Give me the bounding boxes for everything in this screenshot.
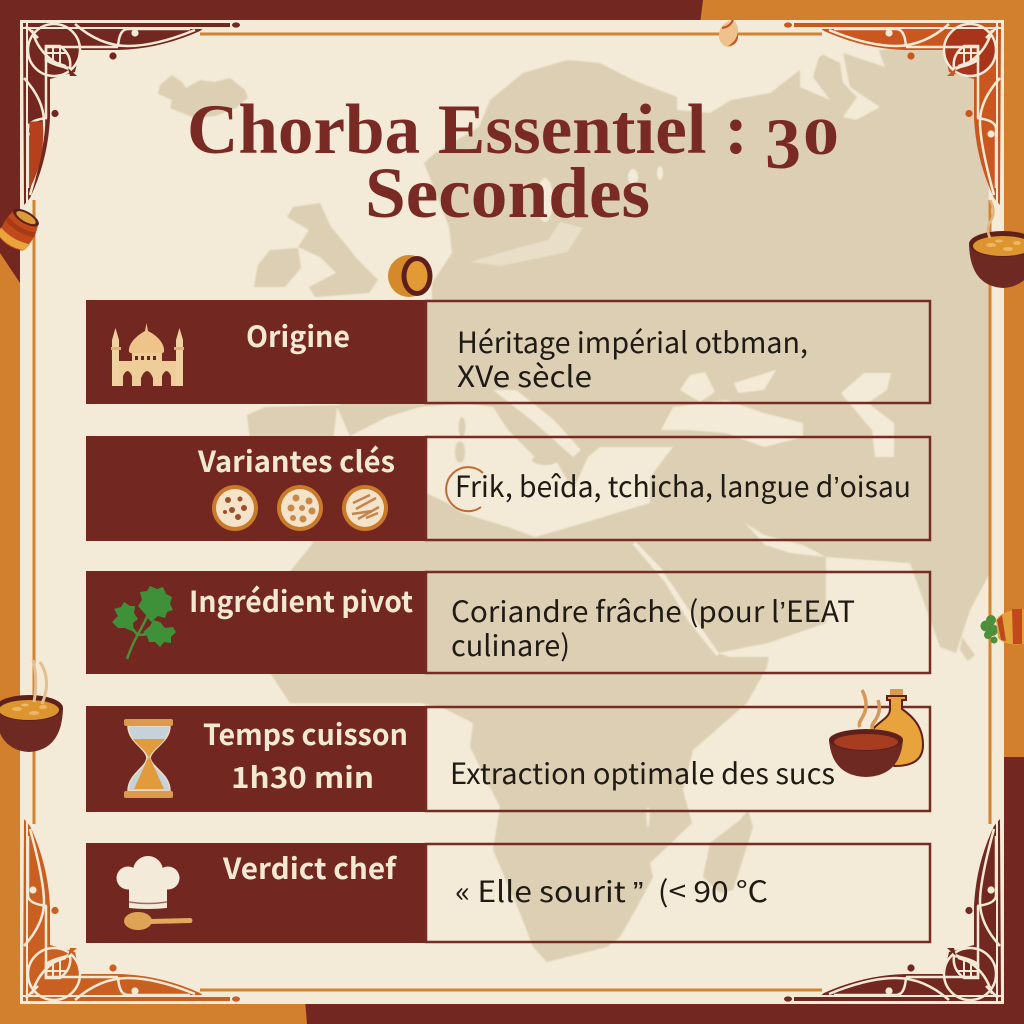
row 4: temps [86, 689, 930, 812]
text: verdict: « Elle sourit ” (< 90 °C [455, 869, 768, 911]
row 1: origine [86, 300, 930, 404]
text: variantes list: Frik, beîda, tchicha, langue d’oisau [455, 464, 911, 506]
map background [158, 36, 989, 962]
corner ornament bottom right [784, 819, 1001, 1002]
map: Madagascar [703, 810, 753, 893]
label: ingredient: Ingrédient pivot [189, 579, 413, 621]
map: Ireland [254, 248, 301, 287]
icon: coriander [112, 586, 176, 659]
row 3 label panel [86, 571, 425, 674]
icon: hourglass [124, 719, 173, 798]
title: Secondes [365, 153, 650, 233]
corner ornament top right [784, 22, 1001, 205]
title: 0 [803, 109, 839, 166]
row 4 value box [426, 707, 930, 811]
decorative nut top [719, 20, 738, 47]
icon: tchicha bowl [342, 485, 388, 531]
decorative carrot right [980, 609, 1024, 644]
row 3 value box [426, 572, 930, 673]
text: heritage [457, 320, 808, 396]
label: temps cuisson [203, 712, 408, 797]
text: heritage: XVe sècle [457, 354, 592, 396]
map: Sri Lanka [960, 637, 975, 661]
label: temps cuisson: 1h30 min [231, 755, 374, 797]
text: heritage: Héritage impérial otbman, [457, 320, 808, 362]
map: Baltic highlight [470, 222, 583, 266]
decorative bowl left [0, 660, 63, 752]
icon: bowl and oil bottle [829, 689, 923, 777]
icon: mosque [111, 323, 184, 386]
decorative disc [388, 255, 432, 297]
row 1 value box [426, 301, 930, 403]
icon: chef hat and spoon [116, 856, 192, 930]
icon: frik bowl [212, 485, 258, 531]
map: Iceland [158, 75, 248, 118]
corner ornament bottom left [23, 819, 240, 1002]
label: verdict: Verdict chef [222, 846, 397, 888]
row 5 label panel [86, 843, 425, 943]
label: variantes: Variantes clés [197, 439, 395, 481]
corner ornament top left [23, 22, 240, 205]
map: Great Britain [287, 203, 378, 297]
accent arc [446, 467, 483, 511]
icon: beida bowl [277, 485, 323, 531]
row 5: verdict [86, 843, 930, 943]
title [187, 91, 839, 233]
row 2: variantes [86, 436, 930, 541]
row 5 value box [426, 844, 930, 942]
title: 3 [765, 104, 801, 184]
row 2 label panel [86, 436, 425, 541]
text: extraction: Extraction optimale des sucs [450, 751, 835, 793]
row 4 label panel [86, 706, 425, 812]
label: origine: Origine [246, 314, 350, 356]
row 2 value box [426, 437, 930, 540]
label: temps cuisson: Temps cuisson [203, 712, 408, 754]
row 1 label panel [86, 300, 425, 404]
text: coriandre [451, 589, 855, 665]
decorative barrel left [0, 204, 44, 255]
text: coriandre: Coriandre frâche (pour l ’EEAT [451, 589, 855, 631]
row 3: ingredient [86, 571, 930, 674]
text: coriandre: culinare) [451, 623, 570, 665]
map: Corsica, Sardinia and Sicily [455, 417, 558, 465]
decorative bowl right [969, 200, 1024, 288]
map: seas [330, 36, 894, 827]
title: Chorba Essentiel : [187, 91, 748, 169]
